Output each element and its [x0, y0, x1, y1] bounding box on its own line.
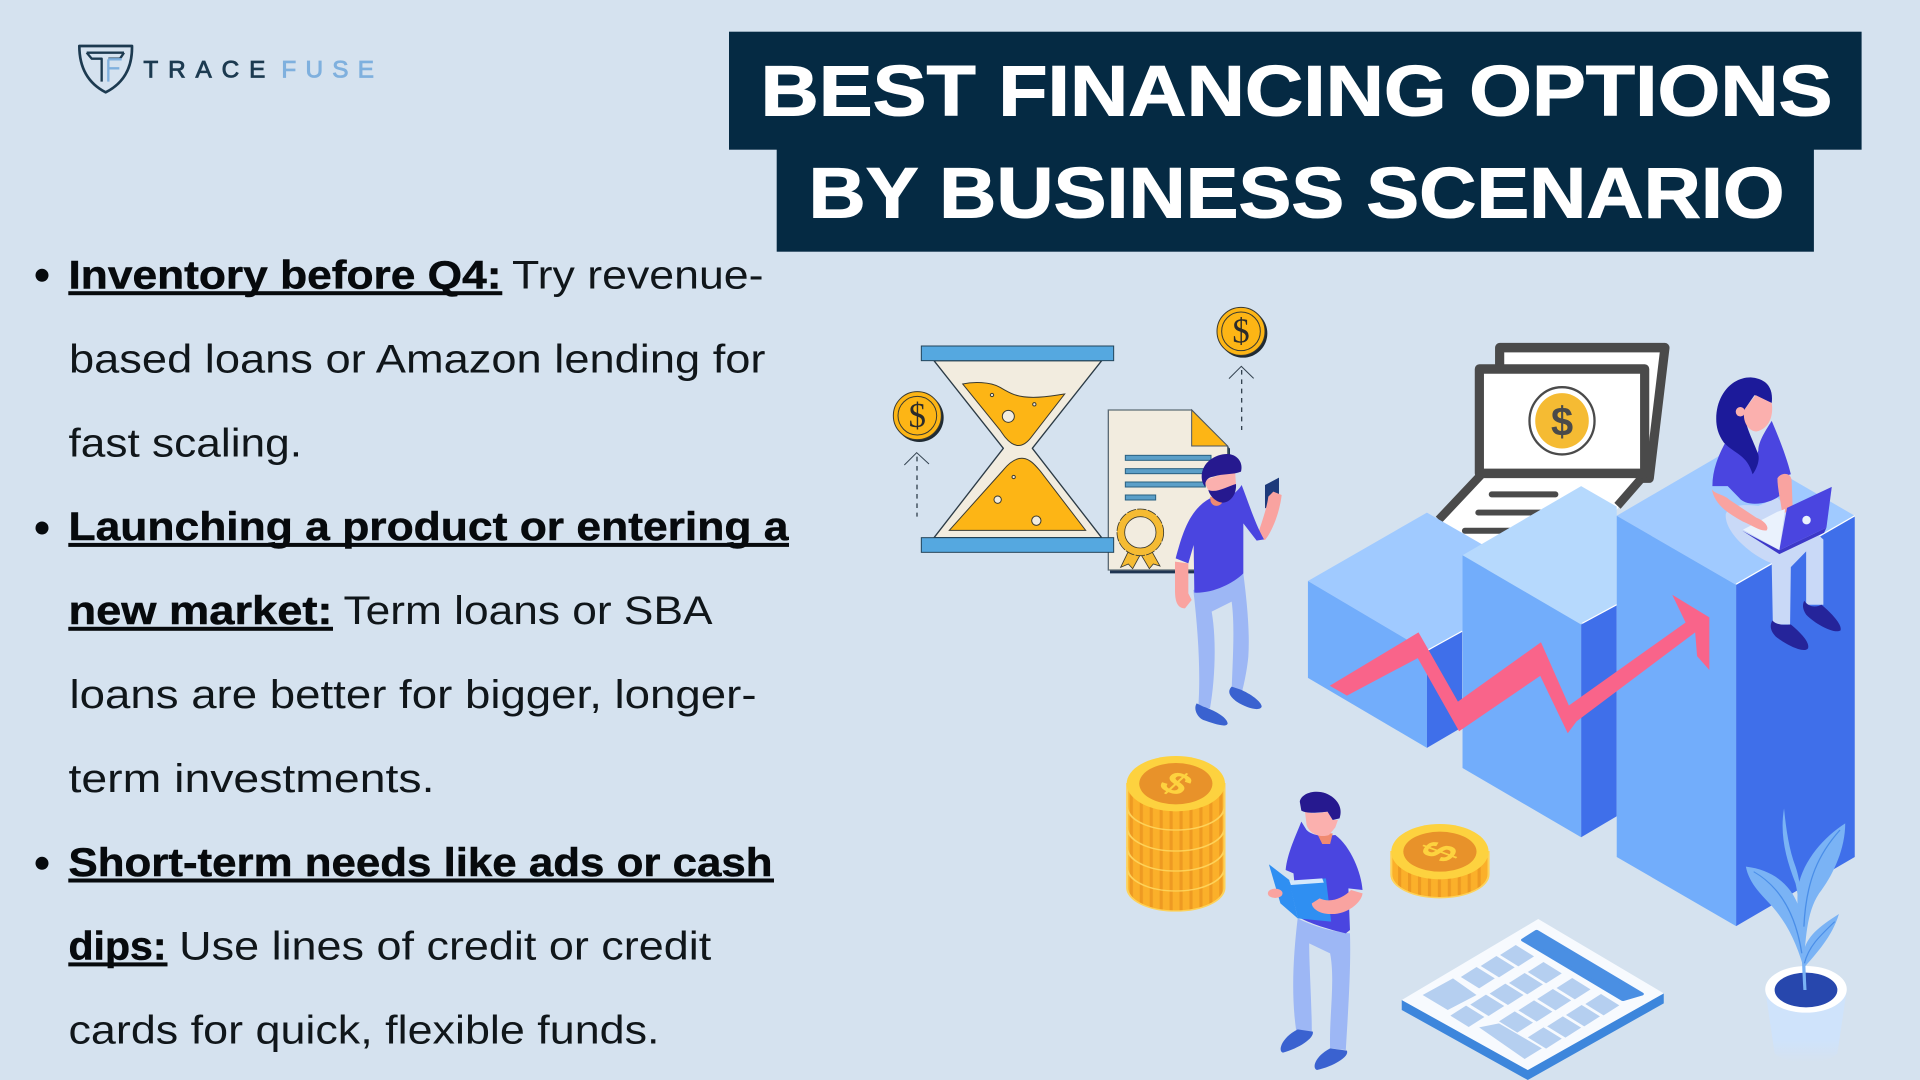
- bullet: short-term needs: Short-term needs like ads or cash: [68, 841, 772, 885]
- logo wordmark: FUSE: [281, 57, 374, 84]
- potted plant: [1746, 808, 1847, 1062]
- hourglass: [921, 346, 1114, 552]
- arrow: growth: [1330, 595, 1709, 733]
- icon: laptop with dollar coin: [1439, 348, 1665, 545]
- woman with laptop: [1712, 377, 1841, 650]
- icon: laptop with dollar coin: $: [1551, 398, 1573, 445]
- coin dollar signs: $: [1150, 765, 1202, 802]
- bullet: launching a product: new market:: [68, 589, 332, 633]
- man reading a book: [1268, 792, 1363, 1070]
- calculator: [1402, 919, 1664, 1080]
- logo wordmark: [143, 57, 374, 84]
- illustration: coins, reader, calculator and plant: [1127, 756, 1847, 1080]
- bullet: launching a product: term investments.: [68, 757, 434, 801]
- illustration: hourglass, certificate and man with phone: [893, 307, 1282, 725]
- bullet: short-term needs: dips:: [68, 925, 166, 969]
- bullet: short-term needs: Use lines of credit or credit: [179, 925, 711, 969]
- title line 2: BY BUSINESS SCENARIO: [808, 154, 1784, 234]
- icon: right coin with arrow: $: [1232, 313, 1250, 351]
- logo wordmark: TRACE: [143, 57, 265, 84]
- bullet: short-term needs: cards for quick, flexible funds.: [68, 1009, 660, 1053]
- icon: right coin with arrow: [1217, 307, 1267, 430]
- bullet list: [36, 254, 789, 1053]
- single coin: [1391, 824, 1489, 898]
- icon: left coin with arrow: [893, 392, 944, 517]
- bullet: launching a product: [36, 505, 789, 801]
- bar chart: short bar: [1308, 513, 1494, 748]
- bullet: inventory before Q4: Inventory before Q4:: [68, 254, 502, 298]
- logo: Trace Fuse: [79, 46, 374, 92]
- icon: shield: [79, 46, 132, 92]
- certificate: [1108, 410, 1230, 573]
- title background bottom: [777, 149, 1814, 252]
- certificate seal: [1117, 509, 1164, 569]
- bullet: inventory before Q4: [36, 254, 766, 465]
- title background top: [729, 32, 1862, 150]
- illustration: laptop, bar chart, arrow and woman: [1308, 348, 1855, 926]
- bullet: short-term needs: [36, 841, 774, 1053]
- bullet: launching a product: Term loans or SBA: [344, 589, 713, 633]
- bullet: inventory before Q4: fast scaling.: [68, 421, 302, 465]
- bar chart: tall bar: [1617, 447, 1855, 926]
- bullet: launching a product: loans are better for bigger, longer-: [70, 673, 756, 717]
- coin dollar signs: [1150, 765, 1469, 867]
- bar chart: middle bar: [1463, 486, 1617, 837]
- bullet: inventory before Q4: based loans or Amazon lending for: [69, 337, 766, 381]
- coin stack: [1127, 756, 1225, 911]
- coin dollar signs: $: [1411, 836, 1469, 867]
- bullet: launching a product: Launching a product or entering a: [68, 505, 789, 549]
- bullet: inventory before Q4: Try revenue-: [512, 254, 764, 298]
- man with phone: [1175, 454, 1282, 725]
- title banner: [729, 32, 1862, 252]
- title line 1: BEST FINANCING OPTIONS: [760, 52, 1832, 132]
- icon: left coin with arrow: $: [909, 397, 926, 435]
